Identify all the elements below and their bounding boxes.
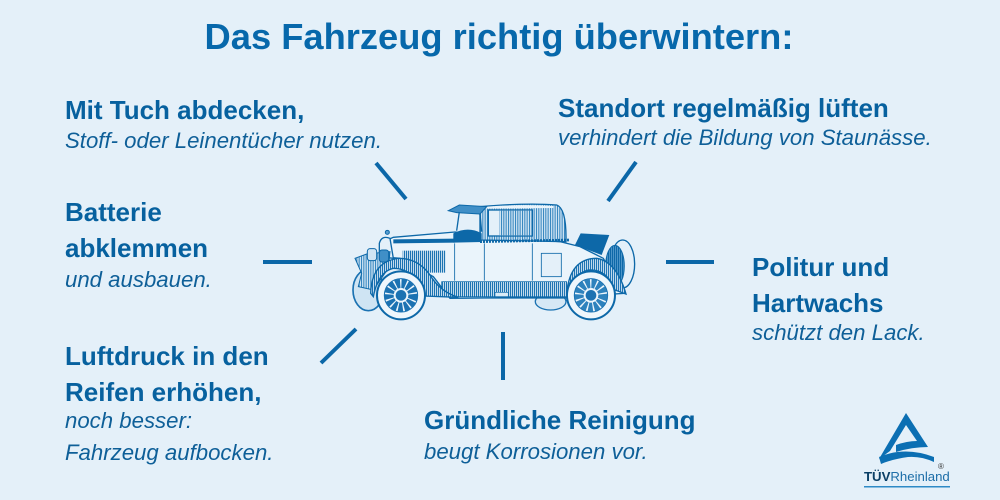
- left headlight: [367, 249, 377, 261]
- side window: [488, 210, 532, 236]
- arrow: bottom: [501, 332, 505, 380]
- text block: Reinigung: [424, 405, 696, 464]
- cowl: [453, 230, 482, 243]
- text block: Reinigung: Gründliche Reinigung: [424, 405, 696, 435]
- body: [380, 232, 625, 298]
- cabin roof: [480, 204, 566, 242]
- spare wheel: [611, 240, 635, 288]
- text block: Luftdruck: [65, 341, 273, 465]
- arrow: bottom left: [321, 329, 356, 363]
- roof visor: [448, 205, 487, 214]
- arrow: left: [263, 260, 312, 264]
- text block: Batterie: [65, 197, 212, 292]
- title: Das Fahrzeug richtig überwintern:: [205, 16, 793, 57]
- running board: [442, 282, 567, 297]
- hood band: [393, 239, 455, 243]
- front fender: [371, 258, 458, 297]
- text block: Luftdruck: Fahrzeug aufbocken.: [65, 440, 273, 465]
- hood louvres: [403, 251, 445, 273]
- text block: Politur: Hartwachs: [752, 288, 884, 318]
- radiator: [379, 237, 393, 258]
- body panel: [541, 253, 561, 277]
- radiator cap: [385, 230, 389, 234]
- text block: Reinigung: beugt Korrosionen vor.: [424, 439, 648, 464]
- arrow: top left: [376, 163, 406, 199]
- text block: Standort lüften: Standort regelmäßig lüften: [558, 93, 889, 123]
- logo wordmark: TÜVRheinland: [864, 469, 950, 484]
- roof top strip: [487, 205, 553, 209]
- arrow: top right: [608, 162, 636, 201]
- far front wheel: [353, 269, 384, 311]
- rear wheel: [567, 271, 615, 319]
- front apron: [355, 252, 390, 290]
- front wheel: [377, 271, 425, 319]
- text block: Politur: Politur und: [752, 252, 889, 282]
- arrow: right: [666, 260, 714, 264]
- text block: Luftdruck: noch besser:: [65, 408, 192, 433]
- text block: Mit Tuch abdecken: Mit Tuch abdecken,: [65, 95, 304, 125]
- logo registered mark: ®: [938, 462, 944, 471]
- text block: Batterie: abklemmen: [65, 233, 208, 263]
- text block: Batterie: und ausbauen.: [65, 267, 212, 292]
- text block: Standort lüften: verhindert die Bildung von Staunässe.: [558, 125, 932, 150]
- text block: Luftdruck: Reifen erhöhen,: [65, 377, 261, 407]
- side window interior: [499, 211, 532, 235]
- text block: Batterie: Batterie: [65, 197, 162, 227]
- icon: vintage car: [353, 204, 635, 319]
- door lines: [455, 243, 532, 281]
- right headlight: [379, 250, 389, 262]
- logo swoosh: [879, 452, 934, 464]
- rear far wheel: [535, 293, 566, 310]
- trunk: [575, 233, 609, 255]
- text block: Standort lüften: [558, 93, 932, 150]
- text block: Politur: [752, 252, 925, 345]
- text block: Luftdruck: Luftdruck in den: [65, 341, 269, 371]
- spare wheel hatching: [606, 245, 624, 287]
- logo underline: [864, 486, 950, 488]
- logo triangle: [879, 413, 928, 459]
- windshield post: [457, 212, 482, 232]
- rear fender: [567, 258, 626, 297]
- text block: Mit Tuch abdecken: Stoff- oder Leinentücher nutzen.: [65, 128, 382, 153]
- text block: Mit Tuch abdecken: [65, 95, 382, 153]
- text block: Politur: schützt den Lack.: [752, 320, 925, 345]
- logo: TÜV Rheinland: [864, 413, 950, 488]
